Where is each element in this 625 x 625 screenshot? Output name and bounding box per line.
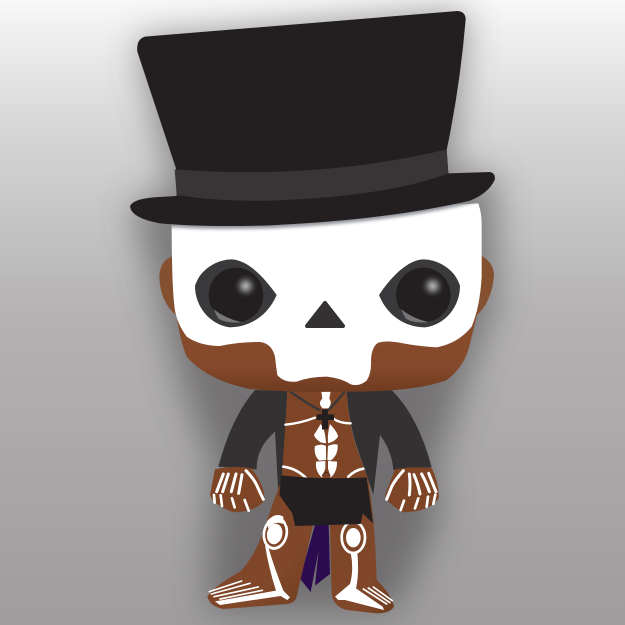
right hand xyxy=(385,467,439,512)
purple sash xyxy=(300,525,330,592)
character xyxy=(130,11,495,613)
right eye xyxy=(379,259,460,327)
hat crown xyxy=(137,11,466,196)
skull mask xyxy=(172,203,482,385)
head xyxy=(159,203,494,392)
hat shadow on skull xyxy=(172,204,474,232)
left jacket arm and tail xyxy=(218,390,287,493)
left leg xyxy=(207,480,313,609)
nose xyxy=(307,303,343,326)
hat band xyxy=(175,149,448,201)
torso xyxy=(282,391,368,480)
right shin and foot bones xyxy=(335,553,384,610)
necklace cross xyxy=(317,409,334,429)
top hat xyxy=(130,11,495,226)
left ear xyxy=(159,256,177,316)
right knee bone xyxy=(342,522,365,553)
hat brim xyxy=(130,172,495,226)
face skin xyxy=(176,310,478,392)
loincloth xyxy=(279,475,373,526)
left knee bone xyxy=(259,514,291,552)
left hand xyxy=(210,467,265,512)
left shin and foot bones xyxy=(215,545,290,605)
right leg xyxy=(330,480,394,613)
drop shadow behind figure xyxy=(130,12,495,610)
right ear xyxy=(475,255,494,317)
right jacket arm and tail xyxy=(347,390,432,495)
left eye xyxy=(195,259,277,327)
